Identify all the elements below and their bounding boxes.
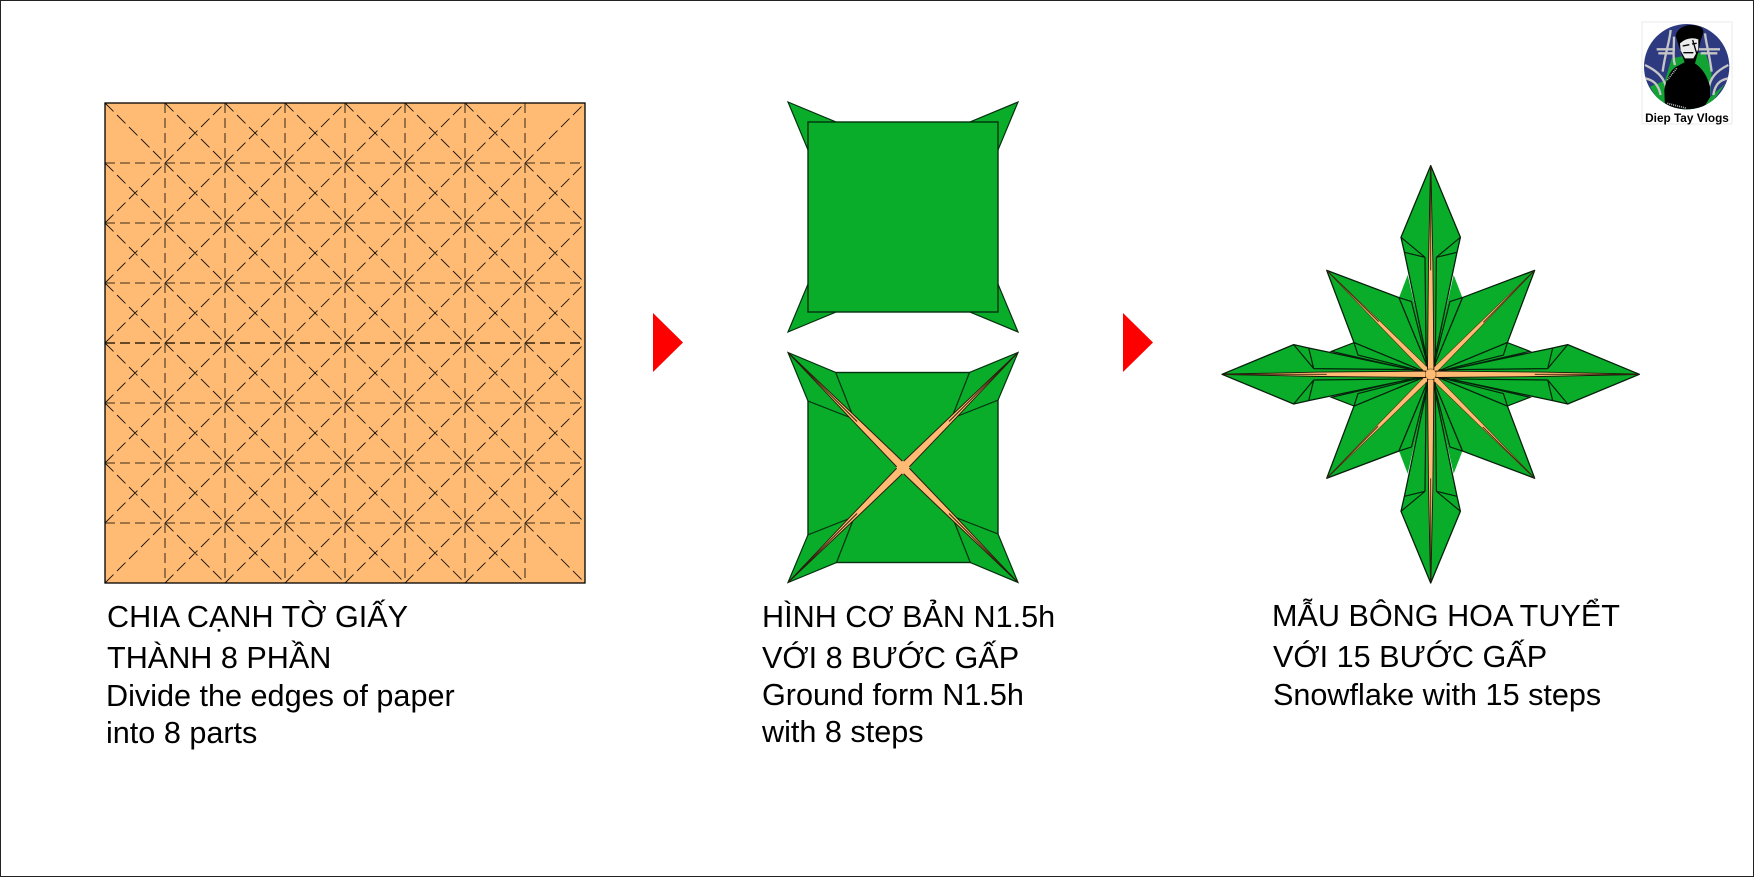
icon: ground form back view [788,102,1018,332]
panel: paper divided into 8 parts [105,103,585,583]
text: caption paper: into 8 parts [106,716,257,750]
text: caption paper [106,599,455,750]
text: caption paper: CHIA CẠNH TỜ GIẤY [107,599,408,634]
icon: snowflake [1222,166,1639,583]
icon: Diep Tay Vlogs logo: Diep Tay Vlogs [1645,111,1729,125]
text: caption snowflake: VỚI 15 BƯỚC GẤP [1273,639,1547,674]
text: caption ground form: Ground form N1.5h [762,678,1024,712]
text: caption paper: Divide the edges of paper [106,679,455,713]
icon: Diep Tay Vlogs logo [1642,22,1732,125]
grid crease lines [105,103,585,583]
text: caption ground form: HÌNH CƠ BẢN N1.5h [762,599,1055,634]
centre crease [105,342,585,344]
arrow 2 [1123,313,1153,372]
text: caption ground form: with 8 steps [761,715,924,749]
arrow 1 [653,313,683,372]
text: caption ground form: VỚI 8 BƯỚC GẤP [762,640,1019,675]
text: caption snowflake [1272,598,1620,712]
text: caption snowflake: Snowflake with 15 steps [1273,678,1601,712]
text: caption snowflake: MẪU BÔNG HOA TUYỂT [1272,598,1620,633]
diagonal crease lines [105,103,585,583]
text: caption paper: THÀNH 8 PHẦN [107,640,331,675]
icon: ground form front view [785,350,1021,585]
text: caption ground form [761,599,1055,749]
